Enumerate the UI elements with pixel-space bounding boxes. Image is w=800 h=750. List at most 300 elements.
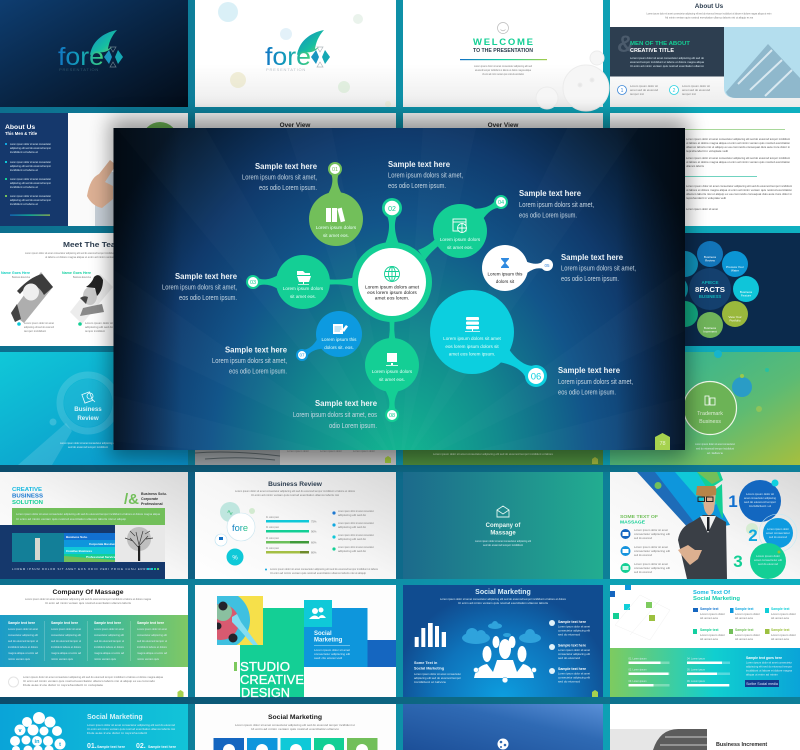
progress bars: 80% — [311, 550, 317, 554]
circle 2 — [746, 514, 797, 552]
slide: globe section — [403, 704, 603, 750]
node 08: green monitor: 08 — [389, 413, 395, 419]
numbered items: 01. — [87, 743, 97, 750]
slide: studio creative design — [190, 585, 396, 700]
gradient band with 4 columns: consectetur adipiscing elit — [8, 633, 38, 637]
bullet column: Lorem ipsum dolor sit amet consectetur — [338, 521, 374, 525]
team member 2: Business Executive — [73, 275, 91, 279]
slide: social icons cluster: Lorem ipsum dolor sit amet consectetur adipiscing elit sed do eiusmod — [87, 723, 176, 727]
coliseum photo — [653, 729, 707, 750]
petals: Feature — [741, 294, 751, 298]
label 02: Lorem ipsum dolors sit amet, — [388, 170, 463, 180]
slide: trademark business — [610, 350, 800, 465]
node 04: green globe window: 04 — [498, 200, 504, 206]
logo: forex on white: fore — [265, 43, 311, 71]
icon cluster: fore — [232, 523, 248, 533]
footer note with icon — [8, 675, 163, 687]
central hub: Lorem ipsum dolors amet — [365, 284, 420, 290]
team member 1: tempor incididunt — [24, 329, 46, 333]
circle 1: amet consectetur adipiscing — [744, 496, 776, 500]
slide: business review section: sed do eiusmod tempor incididunt — [68, 445, 108, 449]
numbered items: Lorem ipsum dolor sit — [630, 84, 658, 88]
chart caption: incididunt ut labore — [414, 680, 447, 684]
gradient band with 4 columns: minim veniam quis — [8, 657, 31, 661]
gradient band with 4 columns: Sample text here — [51, 621, 78, 625]
gradient divider — [10, 214, 50, 216]
heading: CREATIVE — [12, 487, 42, 493]
numbered items: 2 — [673, 88, 676, 94]
heading: Some Text Of — [693, 590, 730, 596]
gradient band with 4 columns: Lorem ipsum dolor sit amet — [8, 627, 38, 631]
gradient band with 4 columns: Sample text here — [8, 621, 35, 625]
bullet column: adipiscing elit sed do — [338, 525, 367, 529]
central hub: amet eos lorem. — [375, 296, 409, 302]
icon list: sed do eiusmod — [634, 553, 652, 557]
bullet column: adipiscing elit sed do — [338, 513, 367, 517]
circle 2: sed do eiusmod — [769, 535, 787, 539]
dark title panel: eiusmod tempor incididunt ut labore et dolore magna aliqua — [630, 60, 705, 64]
label 08 — [293, 398, 377, 430]
node 06: large cyan server: amet eos lorem ipsum. — [449, 352, 495, 356]
heading: Social Marketing — [87, 714, 143, 721]
bullet list: incididunt ut labore et — [10, 150, 38, 154]
right list: consectetur adipiscing elit — [558, 676, 590, 680]
node 04: green globe window: Lorem ipsum dolors — [440, 237, 481, 242]
slide: company of massage section: sed do eiusmod tempor incididunt — [483, 543, 523, 547]
gradient band with progress bars: 05. Lorem ipsum — [687, 668, 706, 672]
right list: consectetur adipiscing elit — [558, 652, 590, 656]
numbered items: 1 — [621, 88, 624, 94]
man with glasses — [678, 486, 727, 579]
intro text: Lorem ipsum dolor sit amet consectetur adipiscing elit sed do eiusmod tempor incididunt ut labore et dolore magna aliqua ut enim — [646, 12, 772, 16]
trademark circle: Business — [699, 419, 721, 425]
stepped strips: Business Solu. — [66, 535, 88, 539]
slide: trademark business: Lorem ipsum dolor sit amet consectetur — [695, 442, 735, 446]
slide: welcome — [403, 0, 609, 111]
label 03: Sample text here — [175, 271, 237, 281]
ampersand mark: Professional — [141, 502, 163, 506]
body text: Ut enim ad minim veniam quis nostrud exercitation — [482, 72, 524, 76]
feature grid: Sample text — [735, 607, 754, 611]
slide: text page: reprehenderit in voluptate velit — [686, 149, 728, 153]
gradient band with 4 columns: minim veniam quis — [94, 657, 117, 661]
gradient band with progress bars: 04. Lorem ipsum — [687, 656, 706, 660]
label 08: Sample text here — [315, 398, 377, 408]
circle 1: sed do eiusmod tempor — [744, 500, 776, 504]
heading: SOLUTION — [12, 500, 43, 506]
slide: sliver with photo: Lorem ipsum dolor — [287, 449, 309, 453]
slide: social marketing blue: Lorem ipsum dolor sit amet consectetur adipiscing elit sed do eiusmod tempor incididunt ut labore et dolore — [440, 597, 566, 601]
slide: text page: ut labore et dolore magna aliqua ut enim ad minim veniam quis nostrud exercitation — [686, 141, 791, 145]
label 07: Sample text here — [225, 344, 287, 354]
heading: about us: About Us — [695, 3, 724, 10]
gradient band with 4 columns: minim veniam quis — [137, 657, 160, 661]
slide: text page: ullamco laboris nisi ut aliquip ex ea commodo consequat duis aute irure dolor in — [686, 192, 793, 196]
floating dots — [714, 350, 769, 412]
footer note with icon: Ut enim ad minim veniam quis nostrud exercitation ullamco laboris nisi ut aliquip ex ea commodo — [23, 679, 156, 683]
big title: DESIGN — [241, 685, 290, 700]
progress bars — [266, 515, 317, 554]
petals: View Your — [728, 315, 742, 319]
icon cluster: % — [232, 556, 238, 562]
slide: business review chart: Lorem ipsum dolor sit amet consectetur adipiscing elit sed do eiusmod tempor incididunt ut labore et dolore — [235, 489, 355, 493]
slide: business review section: Review — [77, 415, 99, 422]
petals: Water — [731, 268, 739, 272]
petals: Increment — [703, 330, 717, 334]
slide: business review section: Lorem ipsum dolor sit amet consectetur adipiscing elit — [60, 441, 116, 445]
label 01 — [242, 161, 317, 192]
numbered items: tempor inci — [682, 92, 696, 96]
petals: Review — [705, 258, 716, 262]
slide: text page: ullamco laboris — [686, 164, 705, 168]
label 04: Sample text here — [519, 188, 581, 198]
gradient band with 4 columns: Lorem ipsum dolor sit amet — [94, 627, 124, 631]
node 05: white hourglass: Lorem ipsum this — [488, 272, 523, 276]
label 06: Lorem ipsum dolors sit amet, — [558, 377, 633, 386]
gradient band with 4 columns: minim veniam quis — [51, 657, 74, 661]
gradient band with 4 columns: Sample text here — [94, 621, 121, 625]
right list — [549, 620, 590, 684]
icon: server stack — [465, 317, 480, 332]
label 08: odio Lorem ipsum. — [329, 421, 377, 430]
slide: trademark business: sed do eiusmod tempor incididunt — [696, 446, 734, 450]
slide: team centre hidden — [195, 233, 396, 346]
central hub: eos lorem ipsum dolors — [367, 290, 417, 296]
node 03: green folder: sit amet eos. — [290, 294, 316, 299]
label 01: Lorem ipsum dolors sit amet, — [242, 172, 317, 182]
slide: over view 1 — [195, 113, 396, 226]
social marketing label: Social — [314, 631, 332, 637]
slide: company of massage section — [403, 472, 603, 579]
bullet column: adipiscing elit sed do — [338, 549, 367, 553]
node 08: green monitor: Lorem ipsum dolors — [372, 369, 413, 374]
ampersand mark: /& — [124, 491, 139, 508]
slide: social marketing tiles: Lorem ipsum dolor sit amet consectetur adipiscing elit sed do eiusmod tempor incididunt ut — [235, 723, 355, 727]
slide: company of massage section: Company of — [486, 523, 521, 529]
colour dots — [147, 568, 159, 570]
slide: meet the team — [0, 233, 188, 346]
side block with button: adipiscing elit sed do eiusmod tempor — [746, 664, 792, 668]
dark title panel: Ut enim ad minim veniam quis nostrud exercitation ullamco — [630, 64, 705, 68]
circle 2: Lorem ipsum dolor — [767, 527, 789, 531]
icon list — [620, 528, 670, 574]
icon list: Lorem ipsum dolor sit amet — [634, 562, 668, 566]
magnifier graphic — [18, 375, 116, 465]
bullet list — [5, 142, 51, 206]
footnote: Ut enim ad minim veniam quis nostrud exercitation ullamco laboris nisi ut aliquip — [270, 571, 367, 575]
slide: social marketing blue — [403, 585, 603, 697]
bullet list: adipiscing elit sed do eiusmod tempor — [10, 164, 51, 168]
node 05: white hourglass: 05 — [544, 263, 550, 268]
page number badge: 78 — [659, 441, 666, 447]
decorative faded bubbles — [218, 2, 391, 107]
numbered items — [618, 84, 711, 96]
people group — [474, 636, 536, 683]
circle 1: Lorem ipsum dolor sit — [746, 492, 774, 496]
page badge — [592, 690, 598, 697]
big title: CREATIVE — [240, 672, 304, 687]
side block with button: Scribe Social media — [746, 682, 778, 686]
man photo — [87, 122, 178, 226]
food photo — [217, 596, 263, 645]
node 01: green — [309, 162, 363, 246]
feature grid: sit amet eos — [735, 616, 754, 620]
bullet list: Lorem ipsum dolor sit amet consectetur — [10, 194, 51, 198]
gradient band with 4 columns: incididunt labore et dolore — [137, 645, 167, 649]
stepped strips: Corporate Business — [89, 542, 118, 546]
dark title panel: & — [617, 31, 634, 58]
slide: business review chart — [195, 472, 396, 579]
trademark circle — [684, 382, 736, 434]
circle 3 — [733, 543, 786, 579]
gradient band with progress bars: 03. Lorem ipsum — [628, 679, 647, 683]
bullet column: Lorem ipsum dolor sit amet consectetur — [338, 533, 374, 537]
inner icon letters: v — [18, 728, 22, 734]
gradient band with 4 columns: magna aliqua ut enim ad — [51, 651, 82, 655]
bullet list: incididunt ut labore et — [10, 168, 38, 172]
intro text: Ad minim veniam quis nostrud exercitation ullamco laboris nisi ut aliquip ex ea — [665, 16, 753, 20]
node 05: white hourglass — [482, 245, 553, 291]
circle 3: sed do eiusmod — [758, 562, 779, 566]
label 02 — [388, 159, 463, 190]
right list: sed do eiusmod — [558, 632, 581, 636]
icon: open envelope — [497, 506, 509, 517]
feature grid: Lorem ipsum dolor — [700, 612, 725, 616]
node 06: large cyan server — [430, 290, 547, 387]
central hub — [352, 242, 432, 322]
bullet list: incididunt ut labore et — [10, 185, 38, 189]
footnote: Lorem ipsum dolor sit amet consectetur adipiscing elit sed do eiusmod tempor incididunt ut labore — [270, 567, 378, 571]
slide: company of massage section: Lorem ipsum dolor sit amet consectetur adipiscing elit — [475, 539, 531, 543]
gradient band with 4 columns: magna aliqua ut enim ad — [137, 651, 168, 655]
icon: globe — [498, 738, 508, 750]
inner icon letters — [18, 728, 61, 748]
progress bars: 03. Lorem ipsum — [266, 536, 279, 540]
social marketing label — [314, 631, 350, 660]
side block with button — [745, 656, 793, 687]
bullet list: incididunt ut labore et — [10, 202, 38, 206]
right list: Lorem ipsum dolor sit amet — [558, 624, 590, 628]
slide: sliver with photo: Lorem ipsum dolor — [353, 449, 375, 453]
label 05: Lorem ipsum dolors sit amet, — [561, 264, 636, 272]
bullet list: adipiscing elit sed do eiusmod tempor — [10, 146, 51, 150]
gradient divider — [460, 59, 547, 60]
numbered items: amet sed do eiusmod — [682, 88, 711, 92]
team member 2 — [62, 271, 114, 333]
heading: Business Increment — [716, 742, 767, 748]
label 08: Lorem ipsum dolors sit amet, eos — [293, 410, 377, 419]
feature grid: Lorem ipsum dolor — [771, 612, 796, 616]
green banner: Ut enim ad minim veniam quis nostrud exercitation ullamco laboris nisi ut aliquip — [16, 517, 127, 521]
dark title panel: Lorem ipsum dolor sit amet consectetur adipiscing elit sed do — [630, 56, 705, 60]
numbered items: tempor inci — [630, 92, 644, 96]
node 05: white hourglass: dolors sit — [496, 279, 515, 284]
numbered items: 02. — [136, 743, 146, 750]
node 07: blue document: dolors sit. eos. — [324, 345, 354, 350]
stepped strips: Professional Services — [86, 555, 118, 559]
node 03: green folder: Lorem ipsum dolors — [283, 286, 324, 291]
numbered items: amet sed do eiusmod — [630, 88, 659, 92]
gradient band with 4 columns: consectetur adipiscing elit — [94, 633, 124, 637]
petals: Business — [704, 255, 717, 259]
slide: social marketing blue: Ut enim ad minim veniam quis nostrud exercitation ullamco laboris — [458, 601, 549, 605]
slide: business review chart: Business Review — [268, 481, 323, 488]
circle 2: 2 — [748, 526, 758, 545]
inner icon letters: in — [35, 739, 40, 745]
side block with button: aliqua ut enim ad minim — [746, 672, 779, 676]
footer note with icon: Lorem ipsum dolor sit amet consectetur adipiscing elit sed do eiusmod tempor incididunt ut labore et dolore magna aliqua — [23, 675, 163, 679]
label 01: Sample text here — [255, 161, 317, 171]
bullet column: Lorem ipsum dolor sit amet consectetur — [338, 509, 374, 513]
label 07: Lorem ipsum dolors sit amet, — [212, 356, 287, 365]
slide: company of massage columns: Lorem ipsum dolor sit amet consectetur adipiscing elit sed do eiusmod tempor incididunt ut labore et dolore magna — [25, 597, 151, 601]
slide: business review section: Business — [74, 406, 102, 413]
chart caption: Lorem ipsum dolor sit amet consectetur — [414, 672, 461, 676]
slide: creative business solution — [0, 472, 188, 579]
dark blue block — [368, 640, 396, 667]
heading: BUSINESS — [12, 494, 43, 500]
slide: some text of massage with man: MASSAGE — [620, 520, 646, 526]
social marketing label: Marketing — [314, 638, 343, 644]
hub circle — [689, 268, 731, 310]
circle 3: 3 — [733, 552, 743, 571]
progress bars: 01. Lorem ipsum — [266, 515, 279, 519]
slide: some text of social marketing — [610, 585, 800, 697]
node 03: green folder: 03 — [250, 280, 256, 286]
node 02: connector to hub — [382, 198, 402, 244]
footer note with icon: Duis aute irure dolor in reprehenderit in voluptate — [23, 683, 104, 687]
chart caption — [414, 661, 461, 684]
hub circle: BUSINESS — [699, 294, 721, 299]
social marketing label: consectetur adipiscing elit — [314, 652, 350, 656]
slide: text page: Lorem ipsum dolor sit amet consectetur adipiscing elit sed do eiusmod tempor incididunt — [686, 137, 790, 141]
numbered items — [87, 743, 176, 750]
label 05 — [561, 252, 636, 283]
slide: over view 2 — [403, 113, 603, 226]
feature grid: Sample text — [771, 628, 790, 632]
slide: text page: ut labore et dolore magna aliqua ut enim ad minim veniam quis nostrud exercitation — [686, 188, 793, 192]
slide: social marketing tiles — [195, 704, 396, 750]
coloured squares — [610, 585, 670, 640]
bullet column: adipiscing elit sed do — [338, 537, 367, 541]
slide: trademark business: ut labore — [707, 451, 724, 455]
slide: business review chart: Ut enim ad minim veniam quis nostrud exercitation ullamco laboris nisi — [251, 493, 339, 497]
big title — [234, 659, 304, 700]
gradient band with 4 columns: Sample text here — [137, 621, 164, 625]
feature grid: Sample text — [700, 628, 719, 632]
node 02: connector to hub: 02 — [388, 206, 396, 213]
gradient band with 4 columns — [0, 615, 188, 667]
coloured tiles — [214, 738, 378, 750]
page number badge — [655, 433, 670, 450]
slide: social icons cluster — [0, 704, 188, 750]
gradient band with 4 columns: sed do eiusmod tempor ut — [51, 639, 81, 643]
feature grid: sit amet eos — [700, 637, 719, 641]
label 01: eos odio Lorem ipsum. — [259, 183, 317, 192]
faded smileys — [536, 51, 609, 111]
label 07 — [212, 344, 287, 376]
icon: smiley — [498, 22, 508, 34]
team member 1: Lorem ipsum dolor sit amet — [24, 321, 54, 325]
gradient band with 4 columns: sed do eiusmod tempor ut — [8, 639, 38, 643]
icon: folder — [297, 271, 311, 285]
label 06 — [558, 365, 633, 396]
slide: social marketing blue: Social Marketing — [475, 589, 531, 596]
dark title panel — [610, 27, 724, 76]
gradient band with 4 columns: Lorem ipsum dolor sit amet — [51, 627, 81, 631]
slide: company of massage columns: Ut enim ad minim veniam quis nostrud exercitation ullamco laboris — [45, 601, 132, 605]
slide: text page — [610, 113, 800, 226]
feature grid: sit amet eos — [700, 616, 719, 620]
circle 1: incididunt ut — [749, 504, 771, 508]
gradient band with 4 columns: sed do eiusmod tempor ut — [94, 639, 124, 643]
slide: company of massage section: Massage — [490, 530, 516, 536]
bar chart — [415, 623, 446, 647]
feature grid: sit amet eos — [771, 637, 790, 641]
gradient band with 4 columns: magna aliqua ut enim ad — [94, 651, 125, 655]
ampersand mark: Corporate — [141, 497, 158, 501]
icon: document with pen — [333, 324, 348, 334]
chart caption: Social Marketing — [414, 666, 445, 670]
gradient band with progress bars: 06. Lorem ipsum — [687, 679, 706, 683]
slide: meet the team: ut labore et dolore magna aliqua ut enim ad minim veniam — [45, 255, 116, 259]
heading: SOME TEXT OF — [620, 514, 658, 520]
icon list: consectetur adipiscing elit — [634, 549, 670, 553]
big title: STUDIO — [240, 659, 290, 674]
slide: some text of social marketing: Social Marketing — [693, 596, 741, 602]
node 03: green folder — [246, 255, 356, 309]
petals: Business — [740, 290, 753, 294]
ampersand mark — [124, 491, 167, 508]
logo: forex on white: PRESENTATION — [266, 67, 306, 72]
slide: over view 1: Over View — [280, 122, 310, 129]
slide: some text of massage with man — [610, 472, 800, 579]
bullet column — [332, 509, 374, 553]
slide: social marketing tiles: Social Marketing — [268, 714, 322, 721]
bullet list: adipiscing elit sed do eiusmod tempor — [10, 198, 51, 202]
ampersand mark: Business Solu. — [141, 492, 167, 496]
bullet list: adipiscing elit sed do eiusmod tempor — [10, 181, 51, 185]
gradient band with 4 columns: incididunt labore et dolore — [51, 645, 81, 649]
logo: forex on white — [265, 30, 330, 72]
logo: forex on dark: PRESENTATION — [59, 67, 99, 72]
side block with button: Sample text goes here — [746, 656, 782, 660]
feature grid: sit amet eos — [771, 616, 790, 620]
social marketing label: sed do eiusmod — [314, 656, 343, 660]
subheading: TO THE PRESENTATION — [473, 48, 533, 54]
blue panel — [304, 608, 368, 667]
label 03: Lorem ipsum dolors sit amet, — [162, 282, 237, 292]
icon: monitor — [386, 353, 398, 366]
label 07: eos odio Lorem ipsum. — [229, 366, 287, 376]
inner icon letters: t — [59, 742, 61, 748]
heading: welcome: WELCOME — [473, 37, 533, 48]
main panel: radial diagram — [114, 128, 685, 450]
circle 1: 1 — [728, 492, 738, 511]
slide: about us navy with man: This Men & Title — [5, 131, 38, 136]
numbered items: Lorem ipsum dolor sit — [682, 84, 710, 88]
slide: text page: Lorem ipsum dolor sit amet consectetur adipiscing elit sed do eiusmod tempor incididunt — [686, 184, 792, 188]
label 03 — [162, 271, 237, 302]
slide: meet the team: Meet The Team — [63, 240, 123, 249]
page badge — [178, 690, 184, 697]
intro text — [646, 12, 772, 20]
diagonal stripes — [637, 472, 730, 530]
icon: hourglass — [501, 258, 509, 268]
slide: sliver green: Lorem ipsum dolor sit amet consectetur adipiscing elit sed do eiusmod tempor incididunt ut labore — [433, 452, 554, 456]
clouds — [462, 621, 541, 644]
node 06: large cyan server: 06 — [531, 372, 541, 382]
